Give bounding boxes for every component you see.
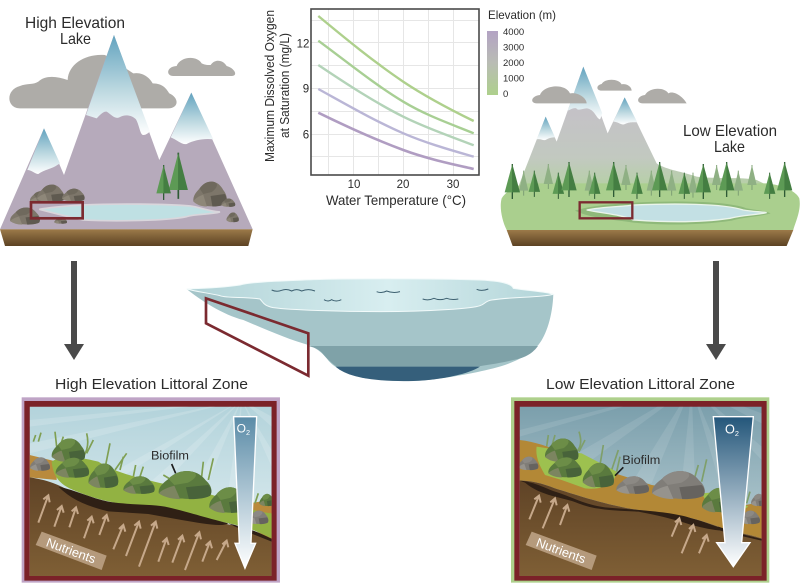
curve: 2000 m — [318, 65, 474, 145]
axis ticks — [297, 38, 459, 191]
oxygen arrow: 2 — [735, 429, 739, 438]
legend: elevation: 4000 — [503, 27, 524, 38]
nutrients label: Nutrients — [44, 536, 98, 566]
red cutaway frame — [206, 298, 308, 376]
legend: elevation: 3000 — [503, 42, 524, 54]
ground — [501, 183, 800, 230]
axis title: y: Maximum Dissolved Oxygen — [263, 10, 277, 162]
heading: high elevation littoral zone: High Elevation Littoral Zone — [55, 376, 248, 393]
curve: 3000 m — [318, 89, 474, 157]
lake rim — [575, 202, 771, 225]
title: low elevation lake: Low Elevation — [683, 123, 777, 140]
rocks — [30, 438, 274, 524]
arrow: high lake to littoral zone — [64, 261, 84, 360]
axis ticks: 10 — [348, 179, 360, 191]
axis ticks: 12 — [297, 38, 309, 50]
title: high elevation lake: Lake — [60, 31, 91, 48]
biofilm label: Biofilm — [622, 453, 660, 467]
lake body — [187, 289, 553, 381]
middle depth layer — [308, 346, 538, 367]
oxygen arrow: O — [237, 421, 246, 435]
biofilm layer — [52, 457, 272, 538]
snow caps — [537, 67, 637, 140]
pale background trees — [519, 164, 757, 198]
mountains — [0, 35, 253, 229]
lake — [39, 204, 220, 221]
axis title: y: at Saturation (mg/L) — [278, 33, 292, 138]
title: high elevation lake: High Elevation — [25, 15, 125, 32]
sediment soil — [520, 481, 762, 576]
soil block — [0, 229, 253, 246]
clouds — [532, 80, 687, 103]
snow caps — [27, 35, 213, 174]
rocks — [518, 438, 766, 524]
biofilm label — [615, 453, 660, 476]
lake — [587, 204, 767, 222]
axis title: y — [263, 10, 292, 162]
oxygen arrow: 2 — [246, 428, 250, 437]
panel: low elevation littoral zone — [511, 387, 769, 583]
cloud: small — [168, 58, 235, 76]
axis title: x: Water Temperature (°C) — [326, 192, 466, 208]
legend: elevation: 2000 — [503, 58, 524, 69]
ripples — [272, 289, 488, 301]
rocks — [10, 182, 239, 225]
curve: 0 m — [318, 16, 474, 121]
panel: high elevation lake scene — [0, 35, 253, 246]
legend: elevation: 1000 — [503, 74, 524, 84]
dark organic band — [520, 481, 762, 541]
nutrient arrows — [529, 496, 709, 553]
nutrients label — [526, 532, 597, 570]
biofilm patches — [536, 447, 748, 515]
heading: low elevation littoral zone: Low Elevation Littoral Zone — [546, 376, 735, 393]
legend: elevation: Elevation (m) — [488, 8, 556, 22]
grasses — [33, 432, 258, 503]
axis ticks: 6 — [303, 130, 309, 142]
cloud: large — [9, 55, 177, 108]
orange sediment — [520, 440, 762, 538]
red locator box — [31, 202, 83, 218]
biofilm label — [151, 448, 189, 473]
red locator box — [580, 202, 632, 218]
axis ticks: 9 — [303, 84, 309, 96]
light rays — [30, 406, 272, 474]
legend: elevation — [487, 8, 556, 100]
deep layer — [336, 367, 480, 381]
sediment soil — [30, 477, 272, 576]
legend: elevation: 0 — [503, 89, 508, 100]
soil block — [507, 230, 793, 246]
lake cross-section — [187, 279, 553, 381]
title: high elevation lake — [25, 15, 125, 48]
axis ticks: 20 — [397, 179, 409, 191]
water surface — [187, 279, 553, 312]
line chart: maximum dissolved oxygen — [263, 9, 479, 208]
trees — [156, 153, 188, 200]
nutrients label — [36, 532, 107, 570]
oxygen arrow — [234, 417, 257, 568]
nutrient arrows — [38, 495, 228, 570]
axis ticks: 30 — [447, 179, 459, 191]
dark organic band — [58, 487, 272, 542]
biofilm label: Biofilm — [151, 448, 189, 462]
grasses — [547, 432, 750, 503]
panel: low elevation lake scene — [501, 67, 800, 246]
panel: high elevation littoral zone — [22, 397, 280, 583]
curve: 4000 m — [318, 113, 474, 169]
mountains — [518, 67, 773, 188]
forest — [505, 162, 792, 199]
light rays — [520, 406, 762, 483]
title: low elevation lake — [683, 123, 777, 156]
oxygen arrow — [713, 417, 753, 567]
orange sediment — [30, 455, 272, 540]
arrow: low lake to littoral zone — [706, 261, 726, 360]
curve: 1000 m — [318, 41, 474, 133]
nutrients label: Nutrients — [534, 536, 588, 566]
oxygen arrow: O — [725, 422, 735, 436]
title: low elevation lake: Lake — [714, 139, 745, 156]
